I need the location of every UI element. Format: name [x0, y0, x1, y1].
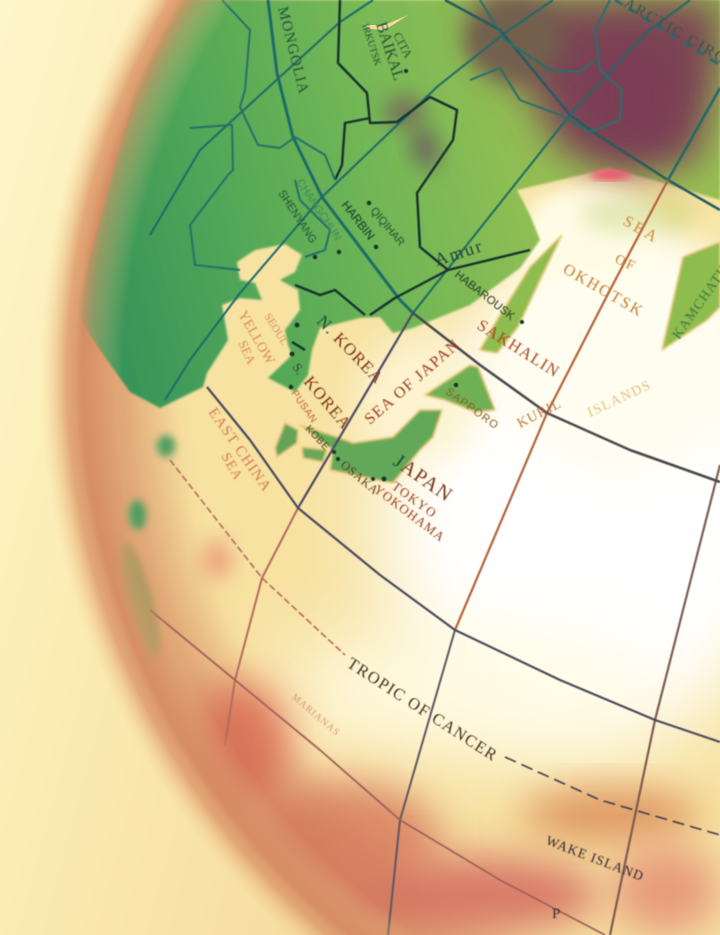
ocean tones: [190, 185, 720, 935]
rivers in black: [292, 0, 530, 350]
meridians and parallels on ocean: [298, 313, 413, 508]
label: ocean names: YOKOHAMA: [371, 481, 448, 545]
island: Hokkaido: [425, 365, 495, 412]
island: Kamchatka: [662, 242, 720, 350]
island: Sakhalin: [480, 235, 562, 353]
label: Russia cities: QIQIHAR: [368, 205, 407, 249]
label: Wake Island: WAKE ISLAND: [544, 833, 646, 884]
label: ocean names: SEA: [218, 450, 245, 484]
label: ocean names: SAPPORO: [443, 386, 501, 432]
label: ocean names: JAPAN: [389, 450, 457, 507]
island: Kyushu: [275, 423, 298, 457]
label: ocean names: OF: [612, 252, 639, 275]
rivers in teal: [190, 0, 622, 270]
label: Russia cities: SHENYANG: [275, 188, 319, 246]
label: fragment letter: P: [552, 906, 560, 922]
label: ocean names: SEOUL: [261, 311, 291, 348]
label: ocean names: KURIL: [515, 397, 564, 432]
label: ocean names: ISLANDS: [585, 378, 654, 421]
label: ocean names: SAKHALIN: [474, 315, 564, 381]
label: Russia cities: IRKUTSK: [359, 23, 383, 68]
label: ocean names: SEA: [235, 338, 260, 367]
label: ocean names: PUSAN: [289, 388, 319, 425]
meridians on land: [150, 0, 720, 400]
label: Russia cities: MONGOLIA: [274, 5, 311, 96]
label: ocean names: N. KOREA: [313, 312, 387, 388]
label: ocean names: OKHOTSK: [560, 261, 647, 321]
label: ocean names: KOBE: [303, 424, 331, 453]
label: Russia cities: CHANGCHUN: [294, 177, 343, 243]
label: Russia cities: Amur: [432, 235, 486, 270]
label: ocean names: KOREA: [300, 372, 355, 433]
Taiwan and Philippines islands: [113, 435, 175, 661]
land: Asia mainland: [75, 0, 720, 408]
label: ocean names: EAST CHINA: [205, 405, 274, 495]
label: ocean names: SEA: [620, 213, 662, 247]
graticule: [150, 0, 720, 935]
label: Russia cities: BAIKAL: [372, 20, 407, 83]
Shores and islands: [275, 235, 720, 483]
label: Russia cities: HABAROUSK: [452, 269, 517, 323]
label: ocean names: TOKYO: [389, 478, 440, 521]
labels: [205, 0, 720, 922]
island: Shikoku: [302, 447, 327, 462]
label: ocean names: [205, 213, 720, 739]
island: Honshu: [300, 410, 442, 483]
label: ocean names: S.: [290, 360, 308, 377]
label: Russia cities: [274, 5, 517, 323]
land: yellow-tint highlight: [580, 195, 700, 235]
baikal lake: [355, 15, 408, 30]
label: ocean names: YELLOW: [235, 308, 277, 368]
label: ocean names: MARIANAS: [289, 692, 342, 739]
label: ocean names: OSAKA: [338, 458, 382, 497]
label: Russia cities: CITA: [390, 30, 416, 61]
label: Russia cities: HARBIN: [339, 198, 378, 243]
maroon highlands: [385, 0, 720, 173]
globe edge shading: [84, 0, 488, 935]
label: Tropic of Cancer: TROPIC OF CANCER: [344, 653, 502, 765]
label: ocean names: SEA OF JAPAN: [361, 336, 464, 428]
red cap at coast: [590, 170, 630, 180]
city dots: [289, 69, 524, 481]
